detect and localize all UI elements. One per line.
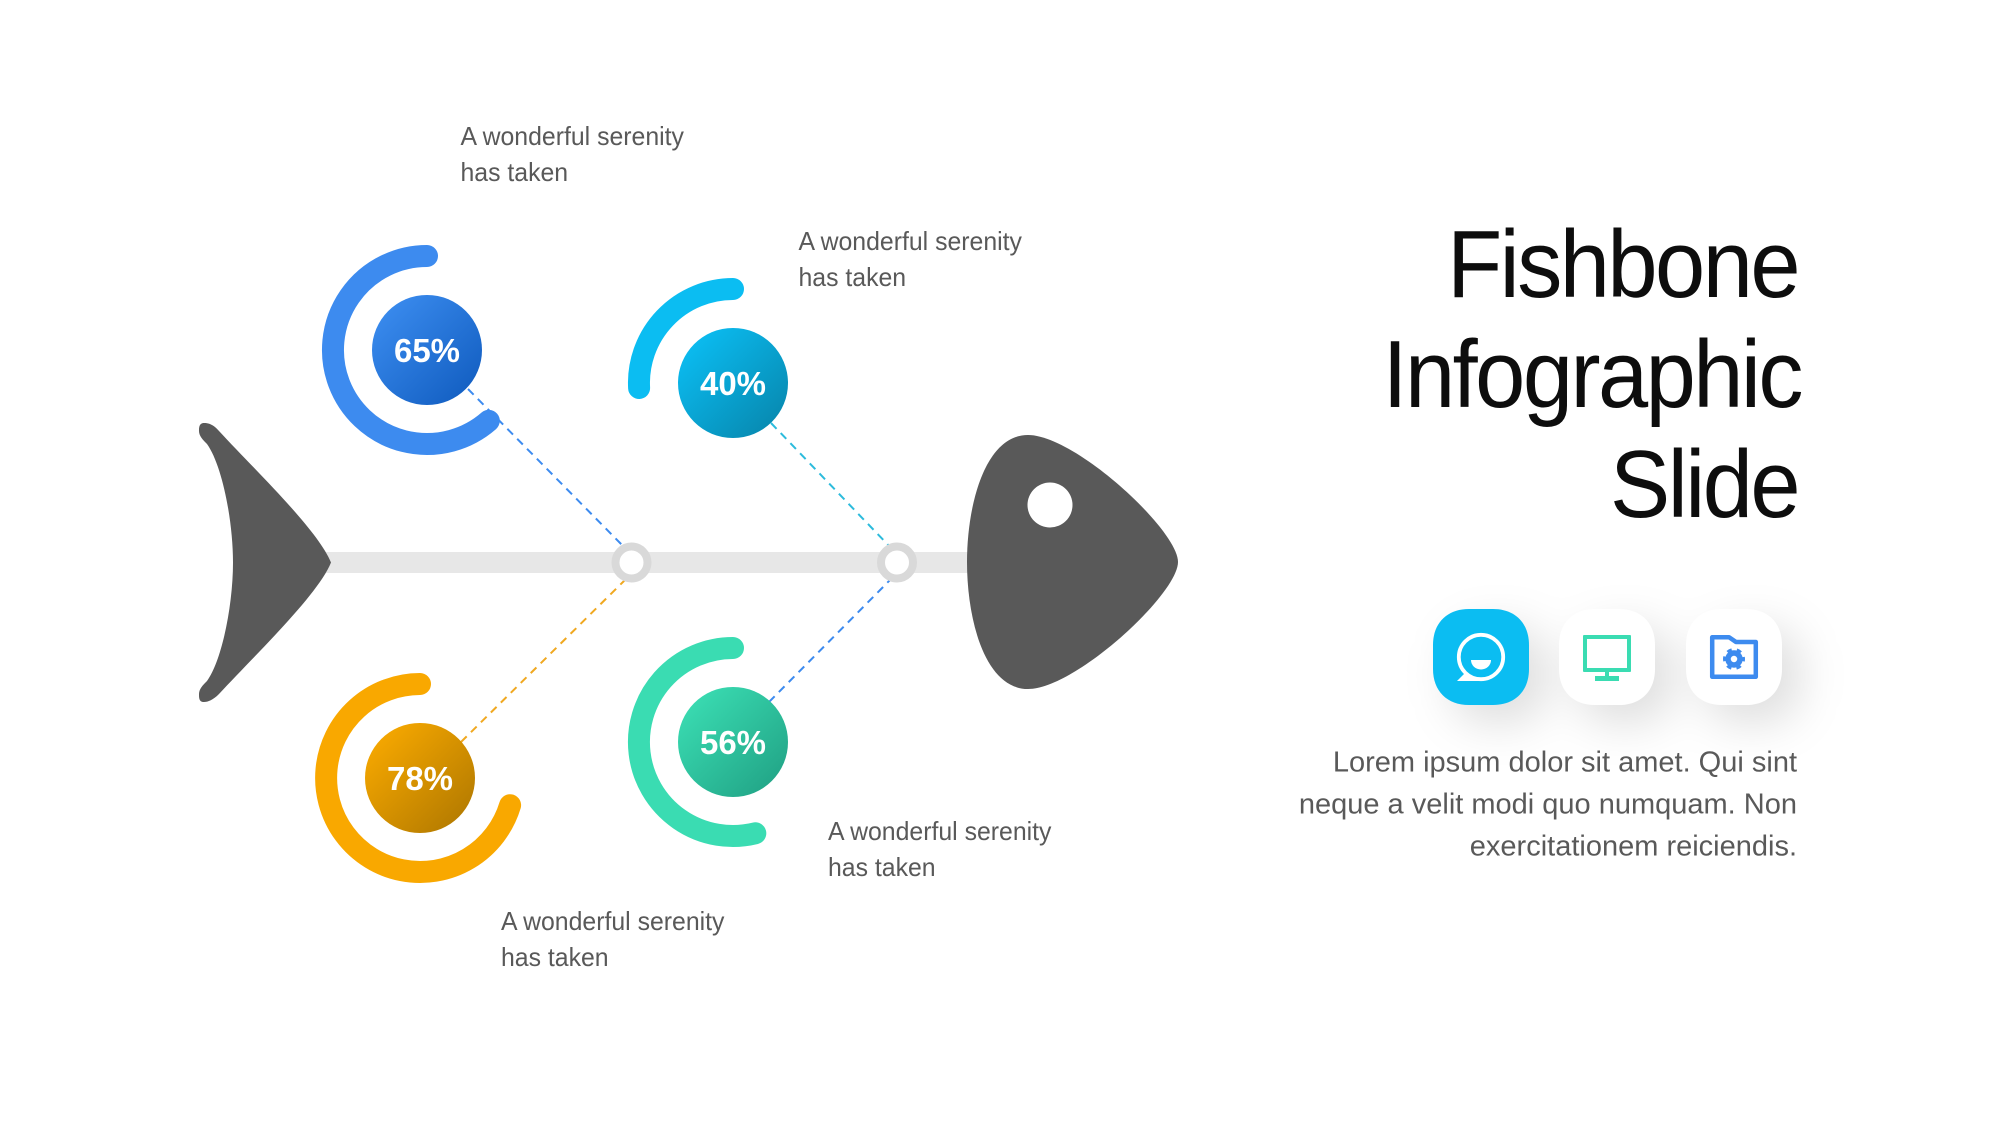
label top-left: A wonderful serenity [460,122,684,151]
icon tile: folder [1686,609,1782,705]
value 56%: 56% [700,724,766,761]
body text: neque a velit modi quo numquam. Non [1299,788,1797,820]
disc 65% [372,295,482,405]
body text: Lorem ipsum dolor sit amet. Qui sint [1333,746,1797,778]
fish head [967,435,1178,689]
disc 40% [678,328,788,438]
title [1382,210,1802,538]
disc 56% [678,687,788,797]
spine node right [881,546,913,578]
label top-right: has taken [798,263,906,292]
label bottom-left: A wonderful serenity [501,907,724,936]
gauge: 40% [639,289,892,549]
label bottom-left: has taken [501,943,609,972]
icon: chat bubble with smile [1457,635,1503,681]
connector 56% [769,578,892,702]
icon: monitor [1583,635,1631,681]
value 40%: 40% [700,365,766,402]
label top-left: has taken [460,158,568,187]
icon tile: monitor [1559,609,1655,705]
connector 78% [461,579,626,742]
body text: exercitationem reiciendis. [1470,830,1797,862]
icon tile: chat [1433,609,1529,705]
label top-right: A wonderful serenity [798,227,1022,256]
gauge: 56% [639,578,892,836]
fish eye [1028,482,1072,528]
value 78%: 78% [387,760,453,797]
connector 40% [771,423,892,549]
ring 56% [639,648,755,836]
label bottom-right: A wonderful serenity [828,817,1051,846]
icon tile shadows [1451,627,1800,723]
spine node left [616,546,648,578]
gauge: 65% [333,256,625,548]
ring 40% [639,289,733,388]
disc 78% [365,723,475,833]
fishbone spine [325,552,975,573]
gauge: 78% [326,579,626,872]
fish tail [199,423,331,702]
value 65%: 65% [394,332,460,369]
title: Infographic [1382,320,1802,428]
icon: folder with gear [1712,637,1756,677]
ring 65% [333,256,489,444]
label bottom-right: has taken [828,853,936,882]
title: Slide [1610,430,1798,538]
connector 65% [468,389,625,548]
title: Fishbone [1447,210,1798,318]
ring 78% [326,684,510,872]
